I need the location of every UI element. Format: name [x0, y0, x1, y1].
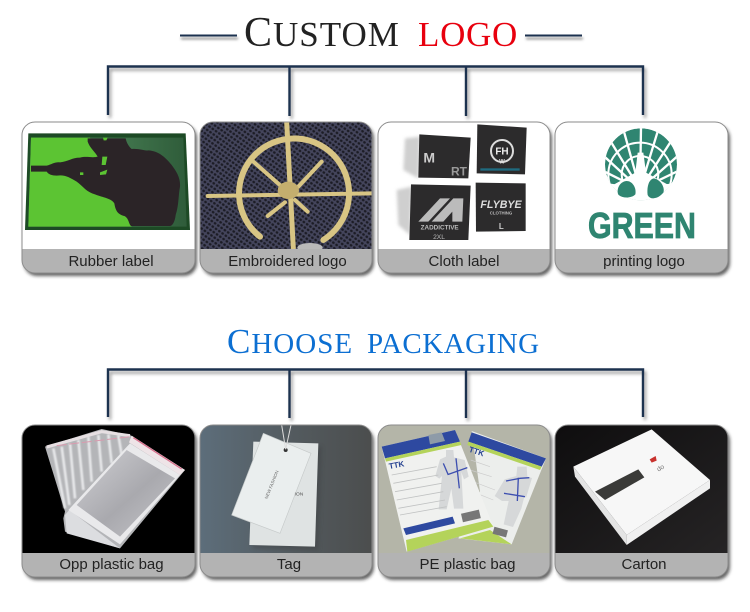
title: Custom logo: [180, 10, 582, 56]
image: woven labels: CLOTHING: [490, 211, 513, 216]
image: woven labels: ZADDICTIVE: [421, 224, 459, 231]
image: woven labels: FLYBYE: [480, 199, 523, 211]
image: hang tags: ION: [295, 492, 304, 498]
connector bracket: packaging: [108, 370, 643, 418]
image: printed bags: [377, 423, 553, 557]
heading: Choose packaging: CHOOSE: [227, 322, 353, 361]
title text: CUSTOM: [244, 10, 400, 56]
panel: tag: [198, 423, 375, 578]
label: Embroidered logo: [228, 253, 347, 270]
image: woven labels: L: [499, 222, 504, 231]
heading: Choose packaging: PACKAGING: [367, 328, 540, 360]
image: woven labels: W: [499, 159, 505, 165]
label: Opp plastic bag: [59, 556, 164, 573]
label: Carton: [621, 556, 667, 573]
image: hang tags: [198, 423, 375, 557]
image: woven labels: RT: [451, 165, 468, 179]
label: PE plastic bag: [420, 556, 515, 573]
panel: PE plastic bag: [377, 423, 553, 578]
label: printing logo: [603, 253, 685, 270]
right sheet: [458, 431, 546, 544]
image: rubber patch: [25, 133, 190, 230]
image: hang tags: NEW FASHION: [264, 470, 280, 500]
right sheet: TTK: [468, 445, 485, 458]
label: Cloth label: [429, 253, 499, 270]
image: white box: [553, 423, 730, 557]
title rule right: [525, 34, 582, 36]
image: woven labels: FH: [495, 146, 509, 157]
image: embroidered wheel: [198, 120, 375, 253]
panel: opp plastic bag: [22, 425, 195, 578]
panel: printing logo: [555, 122, 728, 274]
image: woven labels: M: [423, 149, 435, 165]
wordmark: GREEN: [588, 205, 696, 246]
label: Rubber label: [68, 253, 154, 270]
label: Tag: [277, 556, 301, 573]
title rule left: [180, 34, 237, 36]
panel: cloth label: [378, 122, 550, 274]
image: white box: do: [656, 463, 666, 473]
image: green tree logo: [605, 128, 677, 200]
panel: rubber label: [22, 122, 195, 274]
image: woven labels: 2XL: [433, 234, 445, 241]
panel: embroidered logo: [198, 120, 375, 274]
panel: carton: [553, 423, 730, 578]
connector bracket: custom logo: [108, 66, 643, 116]
left sheet: [382, 430, 493, 552]
left sheet: TTK: [388, 459, 405, 471]
image: woven labels: [397, 124, 527, 241]
image: clear bags: [22, 425, 195, 555]
title text: LOGO: [418, 15, 518, 54]
